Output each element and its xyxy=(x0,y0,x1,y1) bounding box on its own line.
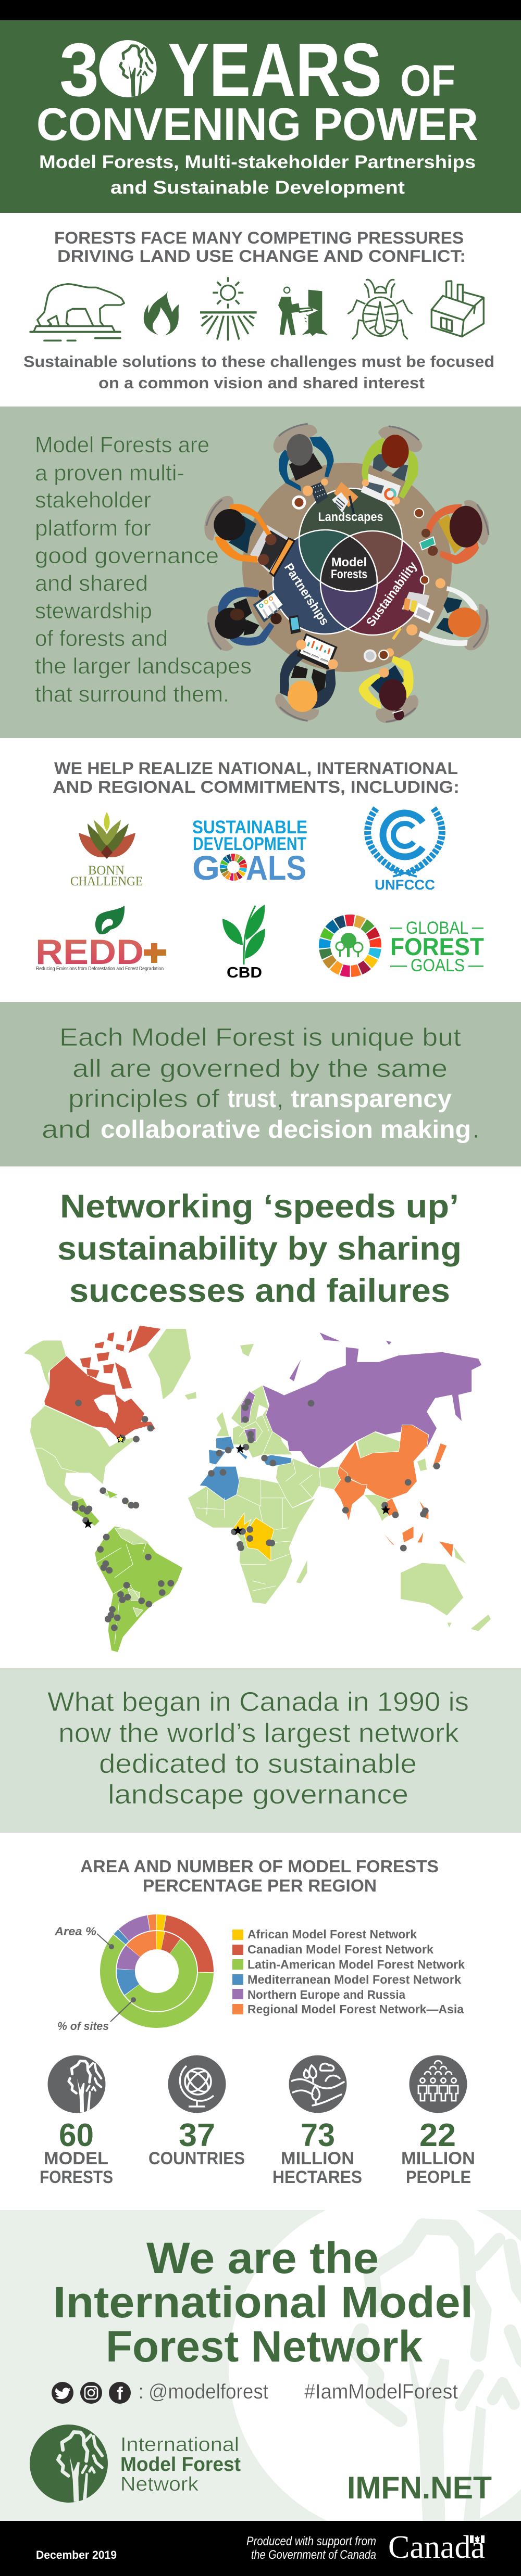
heading: commitments: WE HELP REALIZE NATIONAL, INTERNATIONAL xyxy=(54,759,458,778)
map: Northern Europe and Russia xyxy=(241,1332,482,1468)
logo: Sustainable Development Goals: ALS xyxy=(246,848,306,887)
logo: REDD+: Reducing Emissions from Deforestation and Forest Degradation xyxy=(36,966,164,972)
legend: Northern Europe and Russia xyxy=(247,1988,405,2001)
heading: competing pressures: FORESTS FACE MANY COMPETING PRESSURES xyxy=(54,229,464,247)
logo: UNFCCC: UNFCCC xyxy=(375,877,435,893)
legend: Canadian Model Forest Network xyxy=(247,1943,433,1956)
logo: International Model Forest Network: Model Forest xyxy=(120,2454,241,2476)
icon: factory xyxy=(431,281,483,337)
heading: competing pressures: DRIVING LAND USE CHANGE AND CONFLICT: xyxy=(57,247,466,265)
stat: 22 million people xyxy=(401,2055,475,2187)
world map xyxy=(23,1325,491,1652)
venn labels xyxy=(281,510,420,629)
logo: Sustainable Development Goals xyxy=(192,817,307,887)
stat: 37 countries: 37 xyxy=(179,2117,215,2153)
map: site markers xyxy=(72,1399,440,1631)
logo: Sustainable Development Goals: DEVELOPMENT xyxy=(193,834,306,854)
heading: networking speeds up sustainability xyxy=(57,1188,462,1309)
legend: Latin-American Model Forest Network xyxy=(247,1958,465,1971)
stat: 37 countries xyxy=(148,2055,245,2168)
icon: sun over field xyxy=(200,277,257,340)
SDG wheel xyxy=(222,856,245,879)
text: model forests are: stakeholder xyxy=(35,488,151,513)
stat: 60 model forests: MODEL xyxy=(44,2149,108,2168)
heading: networking speeds up sustainability: successes and failures xyxy=(69,1273,450,1309)
illustration: round table xyxy=(204,424,489,723)
text: largest network: dedicated to sustainable xyxy=(99,1749,417,1779)
logo: Global Forest Goals xyxy=(320,916,484,975)
person: white shirt xyxy=(406,578,489,650)
icon: people xyxy=(410,2055,467,2113)
text: each model forest is unique: . xyxy=(473,1116,479,1144)
person: orange-red jacket xyxy=(420,500,489,564)
top black bar xyxy=(0,0,521,20)
venn labels: Sustainability xyxy=(364,559,420,629)
icon: twitter xyxy=(52,2382,73,2404)
panel: pressures xyxy=(23,229,494,392)
subtitle: Model Forests, Multi-stakeholder Partnerships xyxy=(39,152,476,172)
venn labels: Partnerships xyxy=(281,561,332,628)
social handles xyxy=(52,2380,458,2404)
items: cups and envelope xyxy=(292,482,424,518)
panel: what began in Canada xyxy=(0,1668,521,1833)
logo: Sustainable Development Goals: G xyxy=(192,848,220,887)
heading: commitments: AND REGIONAL COMMITMENTS, INCLUDING: xyxy=(53,778,460,796)
text: model forests are: of forests and xyxy=(35,626,168,651)
stat: 73 million hectares: HECTARES xyxy=(272,2167,362,2187)
heading: commitments xyxy=(53,759,460,796)
stat: 37 countries: COUNTRIES xyxy=(148,2149,245,2168)
text: each model forest is unique: and xyxy=(42,1116,91,1144)
table top xyxy=(242,463,452,672)
heading: networking speeds up sustainability: sustainability by sharing xyxy=(57,1230,462,1267)
legend: Mediterranean Model Forest Network xyxy=(247,1973,461,1986)
callout: area percent: Area % xyxy=(54,1925,96,1938)
text: model forests are: stewardship xyxy=(35,599,152,624)
text: each model forest is unique: trust xyxy=(228,1085,276,1113)
stat: 22 million people: MILLION xyxy=(401,2149,475,2168)
text: largest network: now the world’s largest network xyxy=(58,1718,460,1748)
text: sustainable solutions: on a common vision and shared interest xyxy=(98,374,425,392)
heading: we are the IMFN: We are the xyxy=(146,2234,379,2282)
logo: CBD xyxy=(222,905,265,981)
icon: logger and tree xyxy=(278,287,328,336)
text: model forests are: the larger landscapes xyxy=(35,654,252,679)
text: date: December 2019 xyxy=(36,2548,117,2561)
footer xyxy=(0,2521,521,2576)
heading: we are the IMFN: International Model xyxy=(53,2278,473,2327)
map: country borders xyxy=(35,1415,320,1644)
heading: we are the IMFN xyxy=(53,2234,473,2371)
panel: area and number chart xyxy=(54,1857,465,2040)
map: Asia xyxy=(334,1425,454,1558)
stat: 73 million hectares xyxy=(272,2055,362,2187)
heading: area and number: AREA AND NUMBER OF MODEL FORESTS xyxy=(80,1857,439,1876)
venn labels: Landscapes xyxy=(318,510,383,524)
panel: we are the network xyxy=(0,2193,521,2537)
stat: 60 model forests: FORESTS xyxy=(40,2167,113,2187)
icon: instagram xyxy=(80,2382,102,2404)
stat: 22 million people: PEOPLE xyxy=(406,2167,471,2187)
text: largest network xyxy=(47,1687,469,1810)
panel: key statistics xyxy=(40,2055,475,2187)
icon: facebook: f xyxy=(117,2384,123,2404)
map: Mediterranean xyxy=(200,1437,292,1501)
stat: 60 model forests: 60 xyxy=(59,2117,94,2153)
text: each model forest is unique: collaborative decision making xyxy=(101,1116,471,1144)
icons row: pressures xyxy=(30,277,257,340)
callout: percent of sites: % of sites xyxy=(57,2020,109,2033)
text: each model forest is unique: Each Model Forest is unique but xyxy=(59,1024,461,1051)
heading: networking speeds up sustainability: Networking ‘speeds up’ xyxy=(60,1188,459,1225)
logo: Bonn Challenge: BONN xyxy=(88,864,125,878)
heading: area and number: PERCENTAGE PER REGION xyxy=(143,1876,377,1895)
text: model forests are: Model Forests are xyxy=(35,433,209,458)
subtitle: and Sustainable Development xyxy=(110,177,405,198)
items: phone, papers, pencil xyxy=(289,575,435,639)
title: 30 years of convening power xyxy=(36,28,478,150)
text: model forests are: a proven multi- xyxy=(35,461,184,486)
text: produced with support: the Government of Canada xyxy=(251,2548,376,2562)
person: dark jacket with tablet xyxy=(275,633,338,721)
logo: Global Forest Goals: FOREST xyxy=(390,933,484,960)
logo: International Model Forest Network: International xyxy=(120,2434,239,2456)
panel: commitments xyxy=(35,759,484,981)
icon: tree xyxy=(48,2055,105,2113)
text: model forests are: and shared xyxy=(35,571,148,596)
text: produced with support: Produced with support from xyxy=(246,2534,376,2548)
panel: networking map xyxy=(23,1188,491,1652)
donut: inner ring percent of sites xyxy=(113,1927,201,2015)
logo: International Model Forest Network xyxy=(30,2425,241,2503)
person: blue jacket xyxy=(274,424,334,504)
title: 30 years of convening power: CONVENING POWER xyxy=(36,98,478,150)
text: each model forest is unique: , xyxy=(277,1085,283,1113)
map: Canada xyxy=(44,1325,161,1440)
icon: facebook xyxy=(109,2382,131,2404)
person: orange jacket with laptop xyxy=(204,496,295,577)
map: other land xyxy=(23,1329,491,1631)
heading: competing pressures xyxy=(54,229,466,265)
text: handle: : xyxy=(138,2380,144,2403)
text: model forests are xyxy=(35,433,252,707)
map: star markers xyxy=(83,1435,390,1535)
text: sustainable solutions xyxy=(23,352,494,392)
logo: Global Forest Goals: GOALS xyxy=(411,956,465,975)
stat: 73 million hectares: 73 xyxy=(301,2117,335,2153)
map: Latin America xyxy=(71,1490,183,1652)
icon: fire xyxy=(144,290,179,335)
venn labels: Model xyxy=(331,555,367,569)
people: lower half xyxy=(207,575,489,723)
icon: polar bear xyxy=(30,284,124,340)
text: sustainable solutions: Sustainable solutions to these challenges must be focused xyxy=(23,352,494,371)
text: largest network: landscape governance xyxy=(108,1780,408,1810)
text: each model forest is unique xyxy=(42,1024,479,1144)
donut chart xyxy=(88,1902,226,2040)
subtitle xyxy=(39,152,476,198)
text: produced with support xyxy=(246,2534,376,2562)
logo: International Model Forest Network: Network xyxy=(120,2473,199,2495)
title: 30 years of convening power: OF xyxy=(400,56,455,105)
donut: outer ring area percent xyxy=(88,1902,226,2040)
callout: percent of sites xyxy=(57,1997,136,2033)
icon: globe xyxy=(168,2055,226,2113)
logo: Bonn Challenge xyxy=(70,812,143,889)
map: Africa network xyxy=(232,1513,274,1561)
text: largest network: What began in Canada in 1990 is xyxy=(47,1687,469,1717)
legend xyxy=(232,1927,465,2016)
venn diagram xyxy=(273,488,425,635)
logo: CBD: CBD xyxy=(227,965,262,981)
watermark: tree in circle xyxy=(229,2193,521,2537)
title: 30 years of convening power: 3 xyxy=(59,28,99,112)
heading: we are the IMFN: Forest Network xyxy=(106,2322,423,2371)
legend: Regional Model Forest Network—Asia xyxy=(247,2002,464,2016)
text: each model forest is unique: transparency xyxy=(291,1085,452,1113)
panel: governance principles xyxy=(0,1002,521,1166)
icon: landscape xyxy=(289,2055,347,2113)
text: model forests are: platform for xyxy=(35,516,151,541)
callout: area percent xyxy=(54,1925,114,1949)
text: hashtag: #IamModelForest xyxy=(304,2380,458,2403)
heading: area and number xyxy=(80,1857,439,1895)
person: yellow jacket xyxy=(359,648,418,723)
legend: African Model Forest Network xyxy=(247,1927,417,1941)
person: blue jacket with clipboard xyxy=(207,587,286,651)
text: website: IMFN.NET xyxy=(347,2470,492,2505)
logo: Canada wordmark: Canada xyxy=(388,2530,485,2565)
panel: model forests platform xyxy=(0,407,521,738)
icon: insect xyxy=(348,280,412,339)
logo: REDD+ xyxy=(35,906,166,972)
logo: Global Forest Goals: GLOBAL xyxy=(406,918,468,938)
person: lime jacket xyxy=(361,426,422,507)
text: model forests are: good governance xyxy=(35,543,219,568)
logo: REDD+: REDD xyxy=(35,932,144,972)
people: upper half xyxy=(204,424,489,577)
stat: 22 million people: 22 xyxy=(419,2117,456,2153)
panel: header xyxy=(0,20,521,213)
text: handle: @modelforest xyxy=(148,2380,268,2403)
venn labels: Forests xyxy=(331,567,367,581)
text: model forests are: that surround them. xyxy=(35,682,229,707)
logo: Sustainable Development Goals: SUSTAINABLE xyxy=(192,817,307,837)
logo: UNFCCC xyxy=(368,805,442,893)
stat: 60 model forests xyxy=(40,2055,113,2187)
logo: Bonn Challenge: CHALLENGE xyxy=(70,874,143,889)
title: 30 years of convening power: YEARS xyxy=(168,28,382,112)
stat: 73 million hectares: MILLION xyxy=(281,2149,354,2168)
text: each model forest is unique: all are governed by the same xyxy=(72,1055,448,1083)
text: each model forest is unique: principles of xyxy=(68,1085,220,1113)
